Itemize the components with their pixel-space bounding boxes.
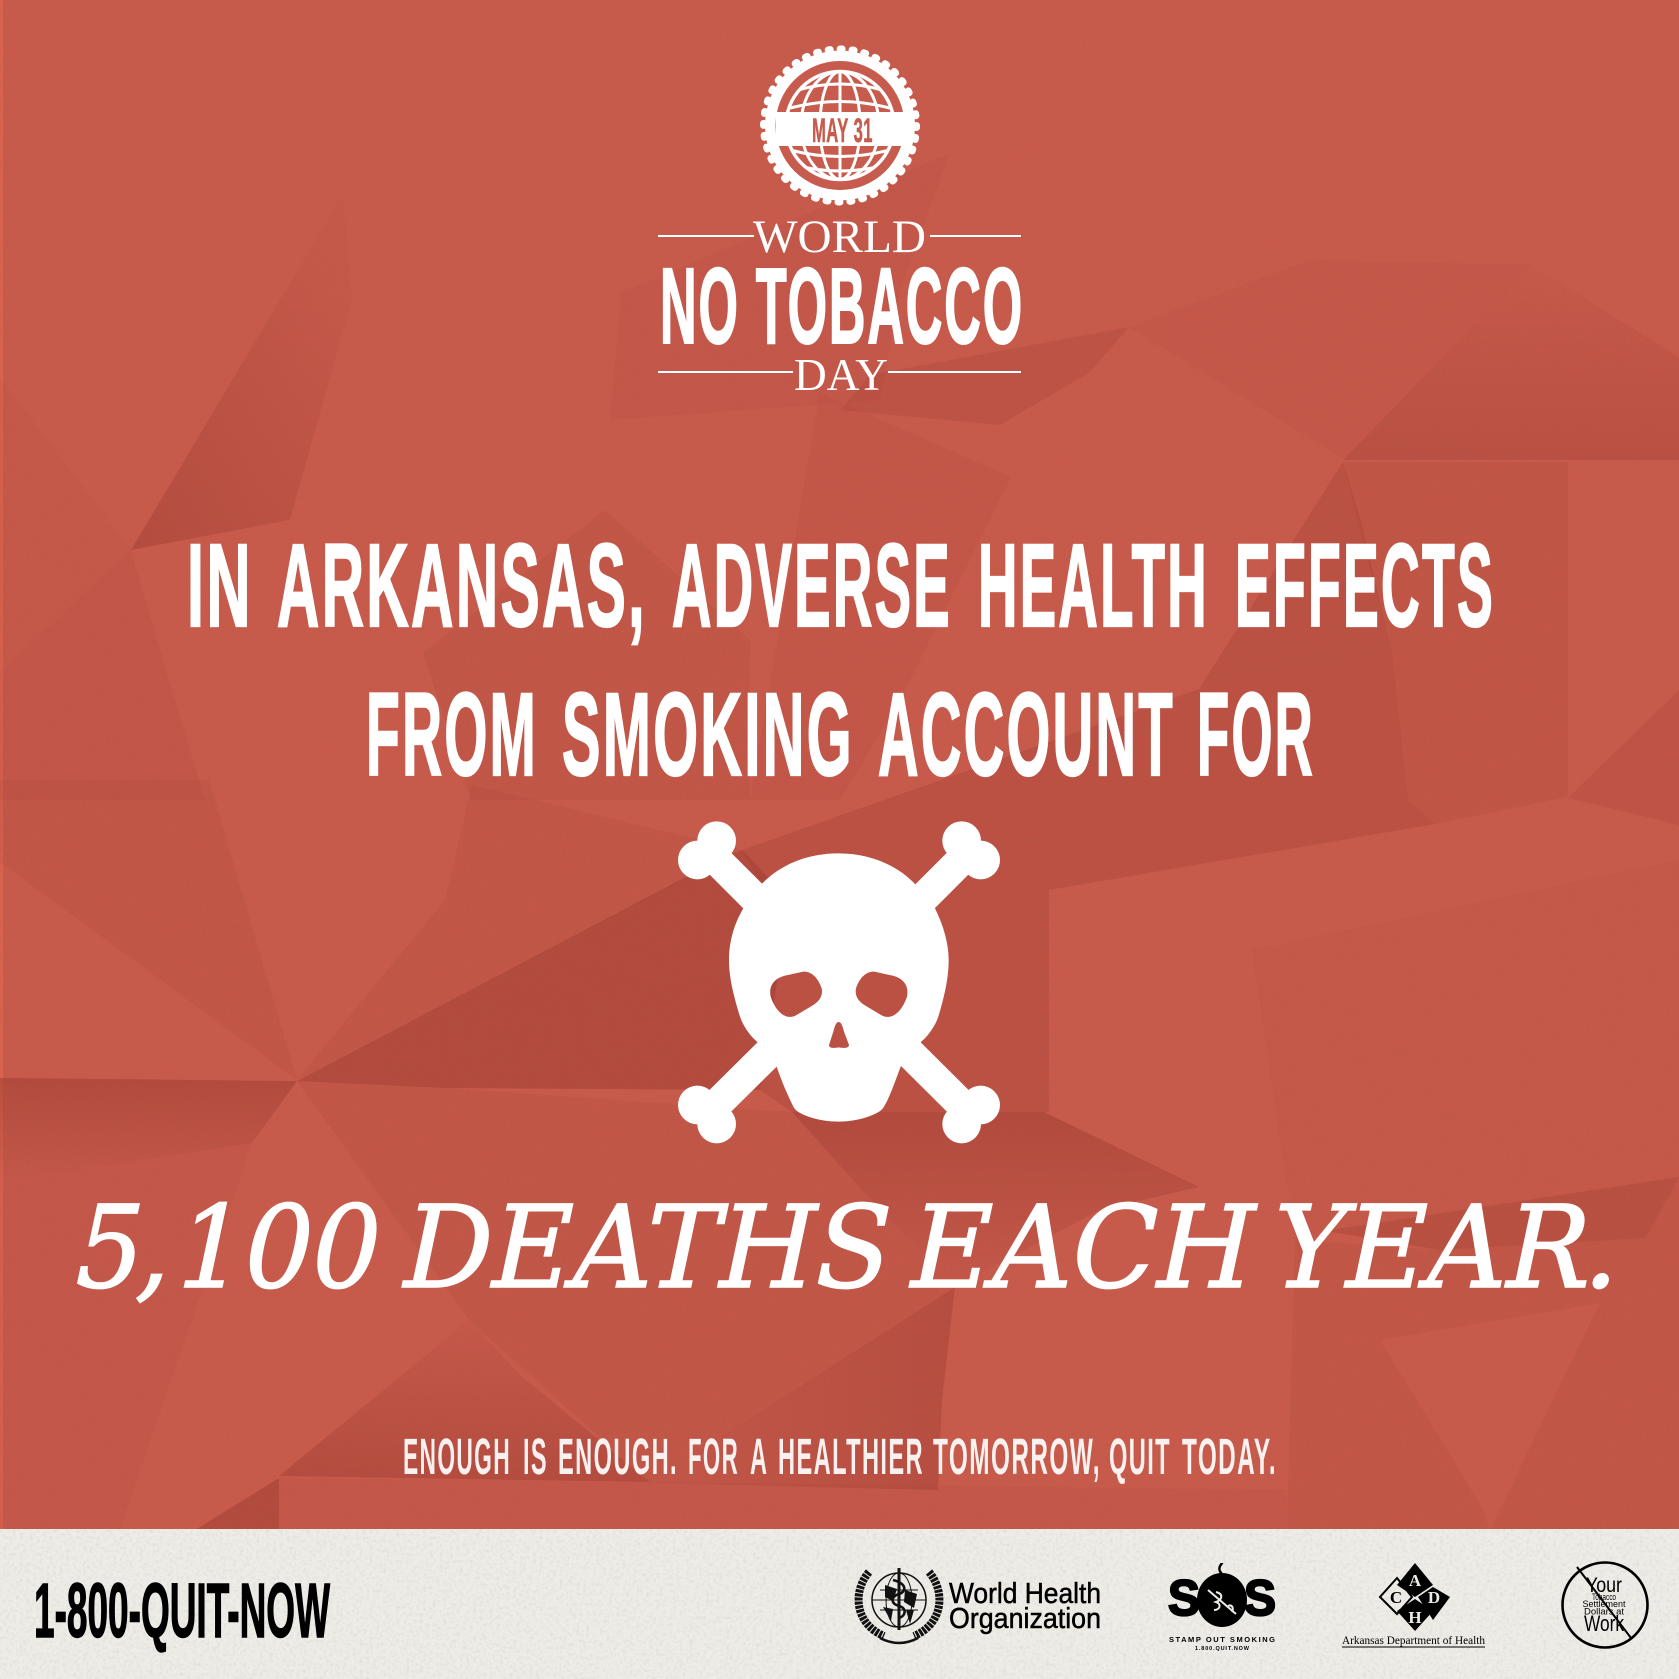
logo: Arkansas Department of Health: H — [1408, 1608, 1422, 1627]
tagline — [403, 1428, 1277, 1485]
SOS mark — [1168, 1563, 1276, 1627]
main statement: ARKANSAS, — [277, 520, 647, 652]
logo: Your Tobacco Settlement Dollars at Work: Dollars at — [1584, 1606, 1625, 1616]
heading: World No Tobacco Day: WORLD — [753, 211, 926, 263]
main statement: FOR — [1197, 669, 1315, 801]
logo: Arkansas Department of Health: A — [1409, 1571, 1422, 1590]
headline: 5,100 deaths each year: 5,100 — [62, 1182, 394, 1315]
tagline: FOR — [688, 1428, 739, 1485]
icon: skull and crossbones — [678, 821, 1000, 1143]
headline: 5,100 deaths each year: EACH — [897, 1182, 1268, 1315]
headline: 5,100 deaths each year — [62, 1182, 1639, 1315]
logo: Your Tobacco Settlement Dollars at Work: Your — [1586, 1574, 1622, 1597]
footer band — [0, 1529, 1679, 1679]
headline: 5,100 deaths each year: YEAR. — [1257, 1182, 1639, 1315]
main statement: FROM — [366, 669, 538, 801]
tagline: ENOUGH. — [558, 1428, 678, 1485]
main statement: HEALTH — [978, 520, 1209, 652]
SOS caption: STAMP OUT SMOKING — [1169, 1635, 1275, 1644]
logo: Your Tobacco Settlement Dollars at Work: Settlement — [1582, 1599, 1626, 1609]
tagline: ENOUGH — [403, 1428, 511, 1485]
logo: May 31 gear badge with globe: MAY 31 — [812, 112, 873, 150]
logo: Arkansas Department of Health: C — [1390, 1588, 1402, 1607]
logo: Your Tobacco Settlement Dollars at Work — [1562, 1562, 1648, 1648]
main statement: SMOKING — [562, 669, 854, 801]
infographic page: NO TOBACCO — [660, 245, 1024, 366]
logo: Arkansas Department of Health — [1342, 1563, 1485, 1648]
heading: World No Tobacco Day: DAY — [794, 350, 888, 400]
logo: Your Tobacco Settlement Dollars at Work: Work — [1584, 1611, 1625, 1636]
heading: World No Tobacco Day — [658, 211, 1024, 400]
headline: 5,100 deaths each year: DEATHS — [390, 1182, 905, 1315]
logo: Stamp Out Smoking — [1168, 1563, 1276, 1652]
tagline: A — [750, 1428, 767, 1485]
SOS caption — [1169, 1635, 1275, 1652]
tagline: TOMORROW, — [933, 1428, 1101, 1485]
SOS mark: S — [1244, 1570, 1276, 1626]
main statement: ACCOUNT — [878, 669, 1175, 801]
tagline: IS — [523, 1428, 548, 1485]
WHO emblem — [859, 1568, 939, 1643]
WHO wordmark — [949, 1578, 1101, 1635]
logo: World Health Organization — [859, 1568, 1101, 1643]
main statement: IN — [187, 520, 253, 652]
WHO wordmark: World Health — [949, 1578, 1101, 1610]
main statement — [187, 520, 1495, 801]
SOS mark: S — [1168, 1570, 1200, 1626]
infographic page: 1-800-QUIT-NOW — [34, 1568, 330, 1654]
department name: Arkansas Department of Health — [1342, 1635, 1485, 1647]
main statement: ADVERSE — [672, 520, 952, 652]
SOS caption: 1.800.QUIT.NOW — [1195, 1646, 1250, 1652]
tagline: HEALTHIER — [778, 1428, 924, 1485]
logo: Your Tobacco Settlement Dollars at Work: Tobacco — [1592, 1592, 1616, 1602]
WHO wordmark: Organization — [949, 1603, 1101, 1635]
logo: May 31 gear badge with globe — [764, 49, 916, 202]
logo: Arkansas Department of Health: D — [1428, 1588, 1440, 1607]
tagline: QUIT — [1109, 1428, 1171, 1485]
infographic page: TODAY. — [1182, 1428, 1277, 1485]
